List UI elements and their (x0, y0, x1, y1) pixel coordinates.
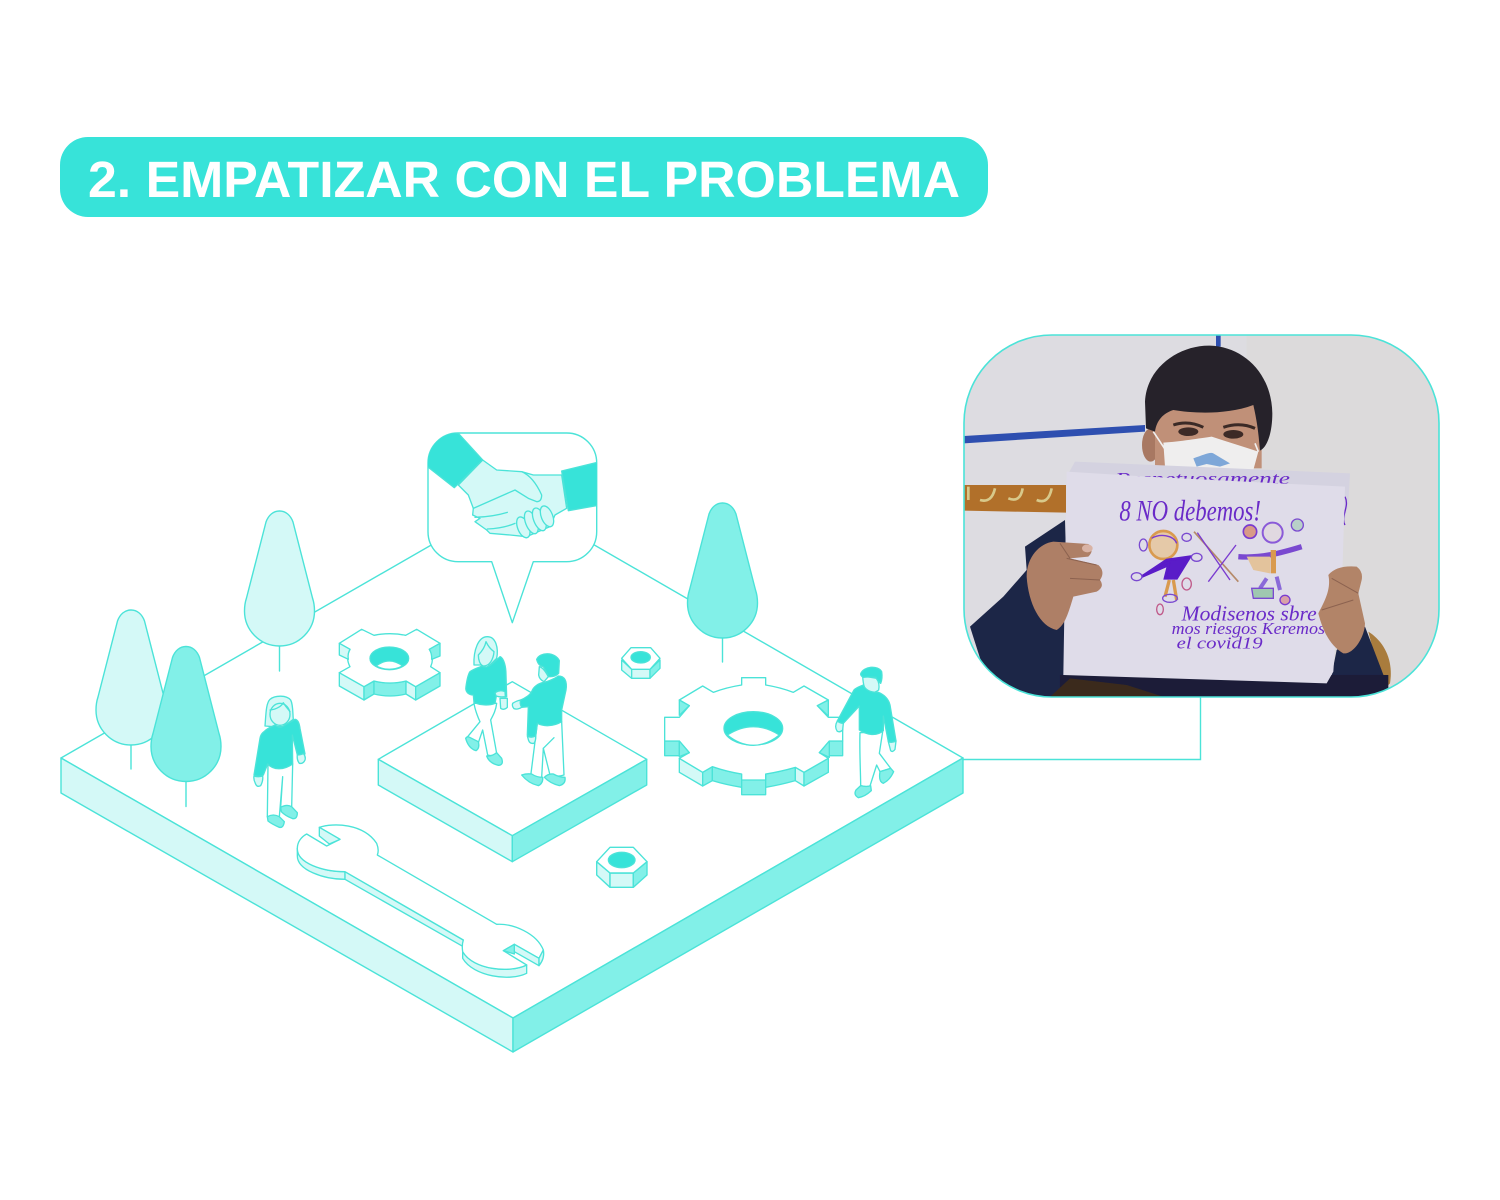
photo: child holding a drawing: el covid19 (1177, 633, 1263, 652)
person: man on raised platform (512, 654, 566, 786)
nut: upper right (622, 648, 660, 678)
photo: child holding a drawing: 8 NO debemos! (1119, 496, 1261, 528)
tree: back left (96, 610, 166, 769)
photo: child holding a drawing: Modisenos sbre (1181, 604, 1317, 626)
tree: front left (151, 646, 221, 806)
title banner (60, 137, 988, 217)
title banner: 2. EMPATIZAR CON EL PROBLEMA (88, 151, 960, 208)
small gear (339, 629, 440, 700)
isometric platform (61, 498, 963, 1052)
tree: back right (688, 503, 758, 662)
nut: lower centre (597, 847, 647, 887)
photo: child holding a drawing (960, 330, 1450, 700)
photo: child holding a drawing: mos riesgos Keremos (1172, 619, 1325, 638)
infographic canvas (60, 137, 1440, 1053)
inner raised platform (378, 682, 647, 862)
photo: child holding a drawing: Respetuosamente (1114, 469, 1290, 488)
person: woman standing left (254, 696, 305, 827)
wrench (297, 825, 544, 977)
large gear (665, 678, 843, 795)
tree: back centre left (244, 511, 314, 671)
speech bubble with handshake (423, 430, 600, 623)
photo frame (964, 335, 1439, 697)
person: woman on raised platform (466, 637, 507, 765)
connector line from platform to photo (963, 697, 1200, 760)
person: man walking right (836, 667, 896, 798)
